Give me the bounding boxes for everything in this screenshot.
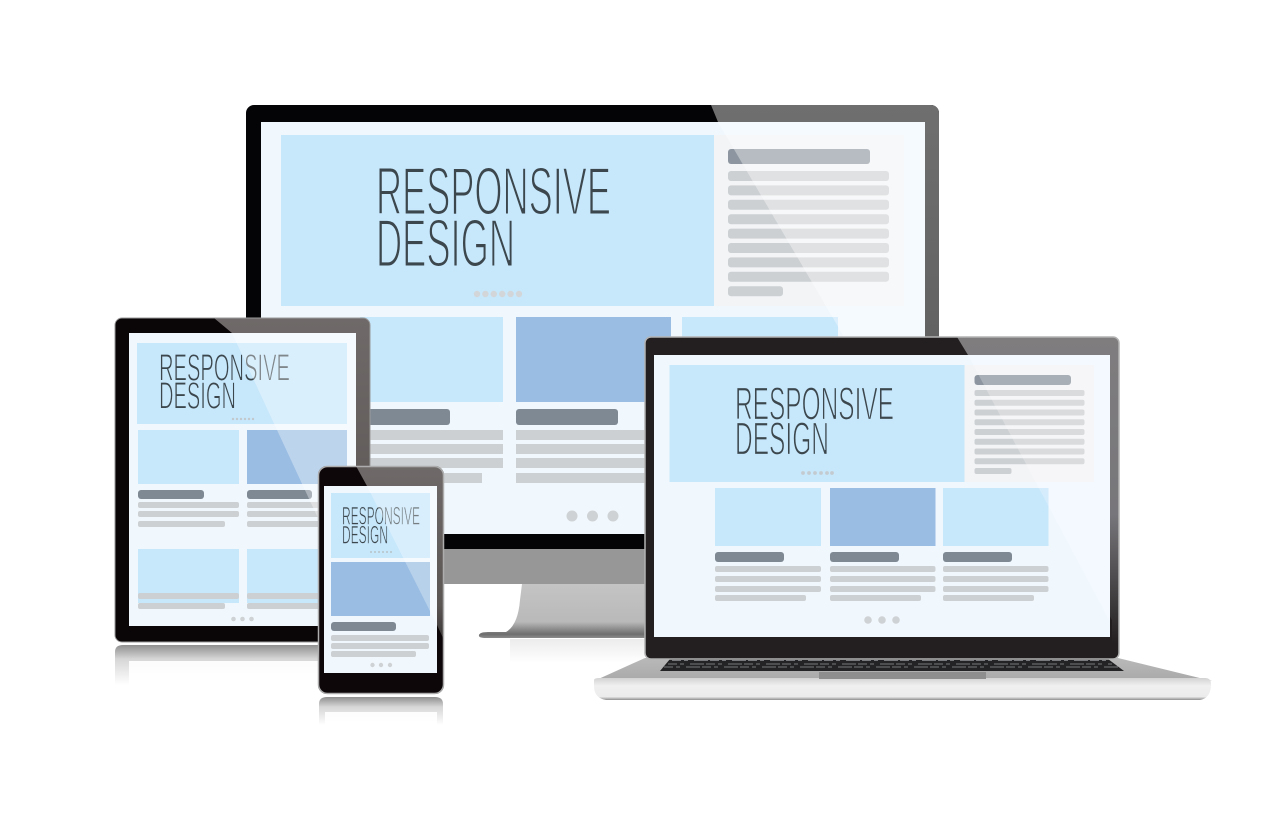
tablet hero banner — [137, 343, 347, 424]
laptop frame — [645, 337, 1119, 660]
monitor pager dots — [566, 510, 618, 522]
laptop heading: RESPONSIVE — [735, 378, 894, 430]
monitor hero pager dots — [474, 291, 522, 297]
laptop hero banner — [670, 365, 964, 482]
laptop sidebar — [964, 365, 1094, 482]
phone title bar and text lines — [331, 622, 429, 657]
monitor frame — [246, 105, 939, 549]
laptop front edge — [594, 678, 1211, 700]
illustration: responsive design on four devices — [114, 105, 1212, 722]
phone: RESPONSIVE — [342, 502, 420, 530]
phone hero dots — [370, 551, 392, 553]
monitor heading: DESIGN — [376, 206, 515, 282]
laptop hero dots — [801, 471, 834, 475]
phone image card — [331, 562, 430, 616]
tablet screen — [129, 333, 356, 626]
laptop deck — [594, 658, 1212, 681]
phone pager dots — [370, 663, 392, 667]
tablet heading: DESIGN — [159, 376, 236, 418]
phone reflection — [319, 697, 443, 728]
monitor glare — [718, 122, 925, 475]
monitor heading — [376, 154, 611, 282]
monitor content cards — [360, 317, 838, 483]
monitor chin — [440, 549, 650, 584]
monitor sidebar — [714, 135, 904, 306]
laptop base — [594, 658, 1212, 700]
monitor hero banner — [281, 135, 714, 306]
tablet heading — [159, 348, 290, 418]
trackpad — [819, 672, 986, 679]
laptop screen — [654, 355, 1110, 637]
laptop pager dots — [864, 616, 900, 624]
monitor stand — [479, 584, 660, 663]
keyboard — [660, 659, 1124, 671]
monitor screen — [261, 122, 925, 534]
phone heading — [342, 502, 420, 549]
laptop — [645, 337, 1119, 660]
phone glare — [367, 486, 437, 625]
phone screen — [324, 486, 437, 673]
tablet pager dots — [231, 617, 254, 621]
laptop heading — [735, 378, 894, 464]
monitor heading: RESPONSIVE — [376, 154, 611, 230]
tablet hero dots — [232, 418, 254, 420]
tablet glare — [232, 333, 356, 600]
laptop glare — [968, 355, 1110, 622]
monitor — [246, 105, 939, 584]
phone hero banner — [331, 493, 430, 558]
tablet frame — [115, 318, 370, 642]
laptop cards — [715, 488, 1048, 601]
phone — [318, 466, 444, 694]
tablet heading: RESPONSIVE — [159, 348, 290, 390]
phone heading: DESIGN — [342, 521, 388, 549]
laptop heading: DESIGN — [735, 412, 829, 464]
tablet — [115, 318, 370, 642]
tablet cards — [138, 430, 347, 609]
tablet reflection — [115, 645, 325, 691]
phone frame — [318, 466, 444, 694]
